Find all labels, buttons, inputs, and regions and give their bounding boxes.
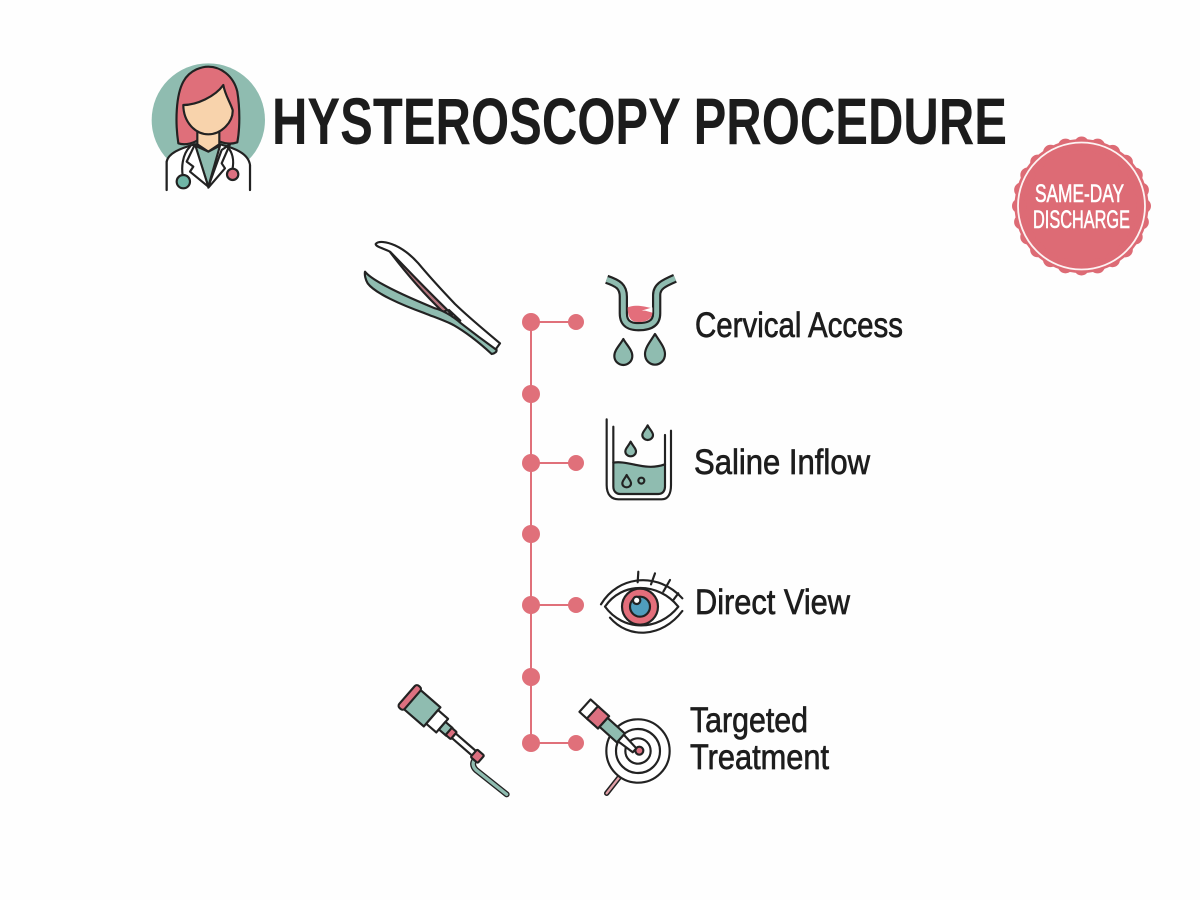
icon: doctor avatar bbox=[152, 63, 265, 190]
icon: saline beaker bbox=[607, 419, 671, 499]
label: targeted treatment bbox=[690, 701, 829, 777]
badge: same-day discharge: SAME-DAY bbox=[1035, 180, 1124, 208]
icon: cervical canal with drops bbox=[607, 278, 675, 365]
label: targeted treatment: Targeted bbox=[690, 701, 808, 740]
icon: resectoscope tool bbox=[397, 684, 507, 794]
step connectors bbox=[531, 322, 576, 743]
label: direct view: Direct View bbox=[695, 583, 851, 622]
icon: eye bbox=[601, 572, 682, 633]
label: saline inflow: Saline Inflow bbox=[694, 443, 871, 482]
badge: same-day discharge: DISCHARGE bbox=[1033, 206, 1130, 234]
icon: target with applicator bbox=[579, 699, 670, 793]
label: targeted treatment: Treatment bbox=[690, 738, 829, 777]
badge: same-day discharge bbox=[1014, 139, 1148, 273]
timeline dots bbox=[522, 313, 584, 752]
label: cervical access: Cervical Access bbox=[695, 306, 903, 345]
icon: forceps bbox=[365, 242, 500, 354]
timeline bbox=[522, 313, 584, 752]
